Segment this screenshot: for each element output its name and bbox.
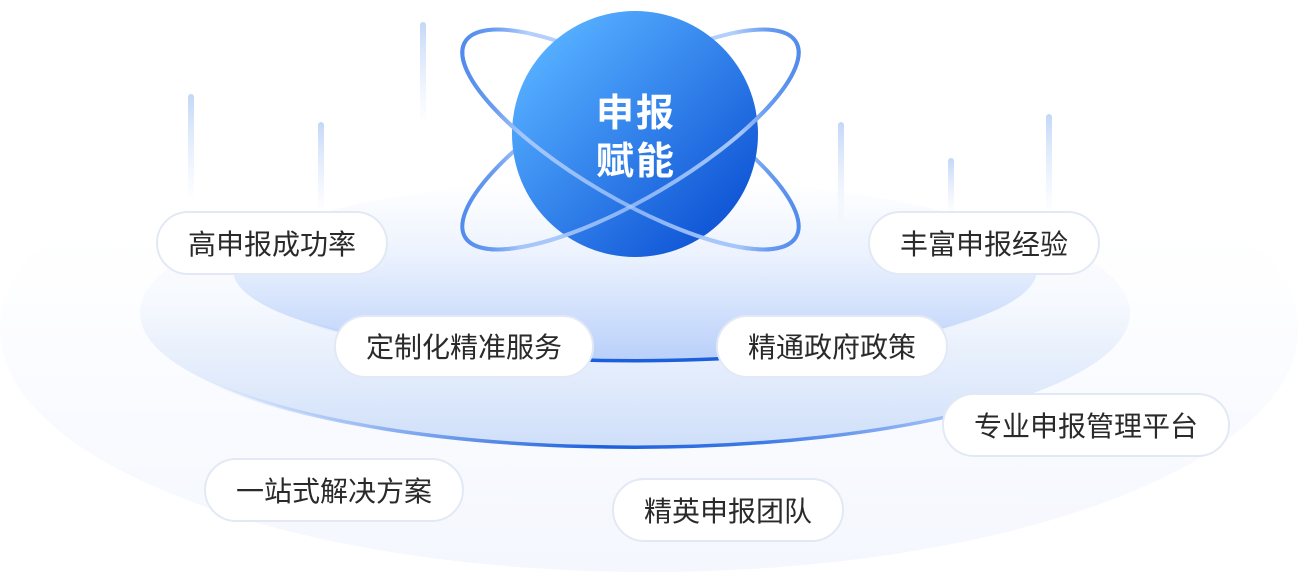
pill: management platform: 专业申报管理平台 xyxy=(974,411,1198,442)
pill: one-stop solution xyxy=(204,458,464,522)
pill: elite team: 精英申报团队 xyxy=(644,496,812,526)
pill: government policy: 精通政府政策 xyxy=(748,332,916,362)
sphere title: 赋能 xyxy=(596,141,676,183)
central sphere xyxy=(512,11,758,257)
pill: customized service: 定制化精准服务 xyxy=(366,332,562,362)
pill: rich experience xyxy=(868,211,1100,275)
orbit rings, front xyxy=(462,42,799,249)
pill: rich experience: 丰富申报经验 xyxy=(900,229,1068,260)
pill: high success rate xyxy=(156,211,388,275)
pill: government policy xyxy=(716,315,948,378)
pill: one-stop solution: 一站式解决方案 xyxy=(236,476,432,506)
pill: management platform xyxy=(942,393,1230,457)
sphere title: 申报 xyxy=(596,93,676,135)
middle platform rim xyxy=(210,382,1000,447)
sphere title xyxy=(596,93,676,183)
pill: customized service xyxy=(334,315,594,378)
pill: elite team xyxy=(612,478,844,542)
pill: high success rate: 高申报成功率 xyxy=(188,229,356,260)
inner platform ellipse xyxy=(233,179,1037,361)
orbit rings, back xyxy=(462,30,799,249)
inner platform rim xyxy=(300,320,970,361)
light bars xyxy=(188,22,1052,224)
middle platform ellipse xyxy=(140,178,1130,448)
